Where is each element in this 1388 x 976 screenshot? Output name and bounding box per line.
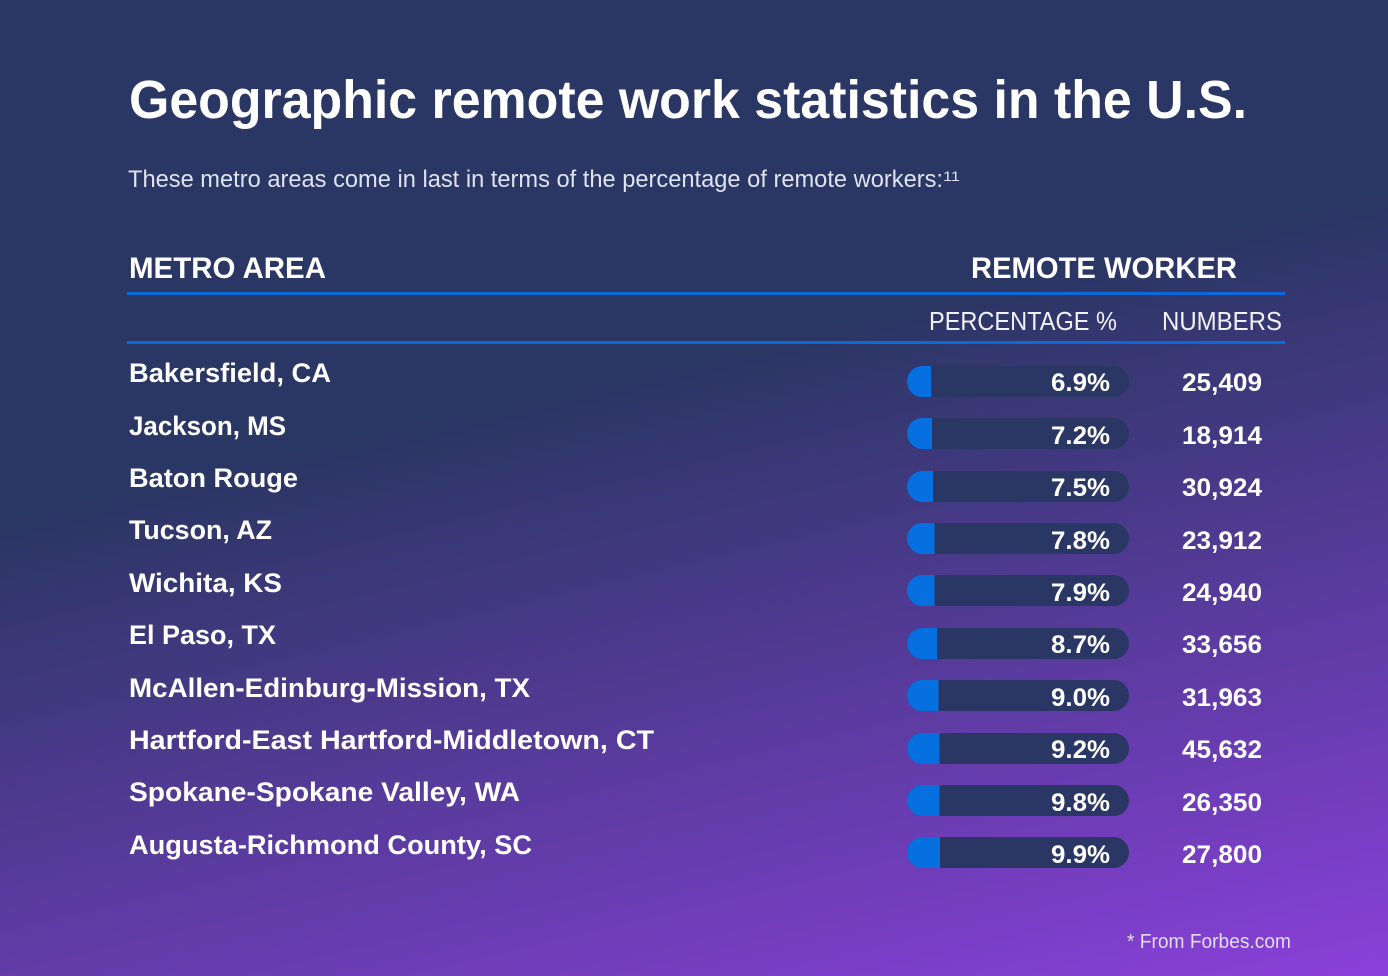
row: Tucson, AZ: Tucson, AZ (129, 515, 272, 545)
row: Augusta-Richmond County, SC: 27,800 (1182, 841, 1262, 869)
row: Hartford-East Hartford-Middletown, CT: Hartford-East Hartford-Middletown, CT (129, 725, 655, 755)
row: El Paso, TX (129, 620, 1262, 659)
column heading: remote worker: REMOTE WORKER (971, 252, 1237, 285)
row: McAllen-Edinburg-Mission, TX (129, 673, 1262, 712)
bar: 9.9%: 9.9% (1051, 841, 1110, 869)
bar: 7.2% (907, 418, 1129, 450)
row: Hartford-East Hartford-Middletown, CT (129, 725, 1262, 764)
row: Spokane-Spokane Valley, WA: Spokane-Spokane Valley, WA (129, 777, 520, 807)
bar: 9.8% (907, 785, 1129, 817)
bar: 9.0%: 9.0% (1051, 684, 1110, 712)
bar: 7.9% (907, 575, 1129, 607)
bar: 7.8%: 7.8% (1051, 527, 1110, 555)
row: Bakersfield, CA: 25,409 (1182, 369, 1262, 397)
subtitle: 11 (943, 168, 960, 184)
row: Augusta-Richmond County, SC: Augusta-Richmond County, SC (129, 830, 532, 860)
sub-heading: numbers: NUMBERS (1162, 306, 1282, 336)
bar: 9.0% (907, 680, 1129, 712)
row: McAllen-Edinburg-Mission, TX: McAllen-Edinburg-Mission, TX (129, 673, 530, 703)
bar: 9.2% (907, 733, 1129, 764)
row: Spokane-Spokane Valley, WA: 26,350 (1182, 789, 1262, 817)
subtitle: These metro areas come in last in terms of the percentage of remote workers: (128, 166, 943, 193)
bar: 7.9%: 7.9% (1051, 579, 1110, 607)
row: Baton Rouge: 30,924 (1182, 474, 1262, 502)
row: Spokane-Spokane Valley, WA (129, 777, 1262, 817)
bar: 7.2%: 7.2% (1051, 422, 1110, 450)
row: Wichita, KS: 24,940 (1182, 579, 1262, 607)
row: Augusta-Richmond County, SC (129, 830, 1262, 869)
row: McAllen-Edinburg-Mission, TX: 31,963 (1182, 684, 1262, 712)
row: Hartford-East Hartford-Middletown, CT: 45,632 (1182, 736, 1262, 764)
bar: 9.8%: 9.8% (1051, 789, 1110, 817)
bar: 7.5%: 7.5% (1051, 474, 1110, 502)
row: Baton Rouge: Baton Rouge (129, 463, 298, 493)
row: Bakersfield, CA (129, 358, 1262, 397)
table header (127, 252, 1285, 344)
bar: 7.8% (907, 523, 1129, 555)
row: Wichita, KS: Wichita, KS (129, 568, 282, 598)
bar: 6.9% (907, 366, 1129, 397)
row: El Paso, TX: 33,656 (1182, 631, 1262, 659)
row: El Paso, TX: El Paso, TX (129, 620, 276, 650)
bar: 9.9% (907, 837, 1129, 869)
column heading: metro area: METRO AREA (129, 252, 326, 285)
row: Tucson, AZ: 23,912 (1182, 527, 1262, 555)
row: Jackson, MS (129, 411, 1262, 450)
row: Bakersfield, CA: Bakersfield, CA (129, 358, 331, 388)
sub-heading: percentage: PERCENTAGE % (929, 306, 1117, 336)
row: Wichita, KS (129, 568, 1262, 607)
source note: * From Forbes.com (1127, 931, 1291, 953)
bar: 7.5% (907, 471, 1129, 502)
row: Jackson, MS: 18,914 (1182, 422, 1262, 450)
bar: 8.7%: 8.7% (1051, 631, 1110, 659)
row: Jackson, MS: Jackson, MS (129, 411, 286, 441)
bar: 8.7% (907, 628, 1129, 659)
bar: 6.9%: 6.9% (1051, 369, 1110, 397)
row: Baton Rouge (129, 463, 1262, 502)
row: Tucson, AZ (129, 515, 1262, 555)
title: Geographic remote work statistics in the U.S. (129, 70, 1247, 130)
bar: 9.2%: 9.2% (1051, 736, 1110, 764)
